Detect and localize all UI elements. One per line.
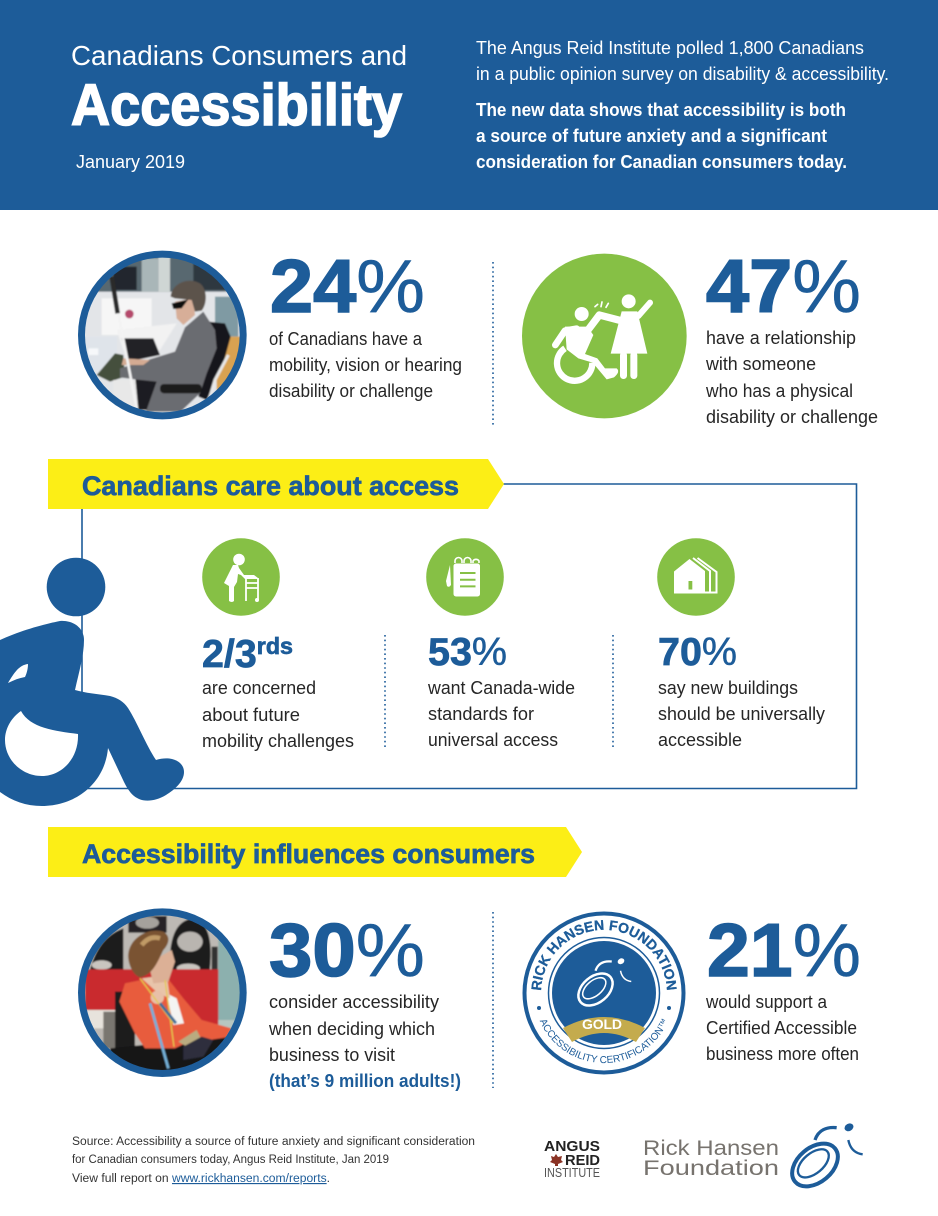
stat: 30%	[268, 908, 461, 1091]
logo: Rick Hansen Foundation: Foundation	[643, 1157, 779, 1180]
stat: 21%	[705, 908, 861, 1064]
text	[427, 678, 575, 750]
title	[71, 40, 407, 138]
stat text: disability or challenge	[706, 407, 878, 427]
stat text: (that’s 9 million adults!)	[269, 1071, 461, 1091]
banner: Canadians care about access: Canadians care about access	[82, 471, 459, 501]
icon: Rick Hansen Foundation gold certification badge: GOLD	[582, 1016, 622, 1032]
photo: woman in orange cardigan laughing	[78, 908, 247, 1077]
date: January 2019	[76, 152, 185, 172]
stat text: Certified Accessible	[706, 1018, 857, 1038]
source note: Source: Accessibility a source of future anxiety and significant consideration	[72, 1136, 475, 1148]
figure: 70%	[658, 631, 737, 674]
stat text: consider accessibility	[269, 992, 439, 1012]
text: should be universally	[658, 704, 825, 724]
icon: wheelchair figure	[0, 558, 184, 806]
text: say new buildings	[658, 678, 798, 698]
figure: 2/3	[202, 633, 256, 676]
stat text	[705, 328, 878, 427]
stat text: who has a physical	[705, 381, 853, 401]
text	[658, 678, 825, 750]
icon: Rick Hansen Foundation gold certification badge: ACCESSIBILITY CERTIFICATION™	[540, 1018, 666, 1064]
icon: notepad	[426, 538, 504, 616]
icon: houses	[657, 538, 735, 616]
stat text: would support a	[705, 992, 828, 1012]
stat text: business more often	[706, 1044, 859, 1064]
text: universal access	[428, 730, 558, 750]
icon: white wheelchair swirl	[572, 957, 631, 1012]
stat: 21%: 21%	[707, 908, 861, 992]
header band	[0, 0, 938, 210]
text: accessible	[658, 730, 742, 750]
source note	[72, 1136, 475, 1185]
stat: 47%	[705, 244, 878, 427]
banner: Accessibility influences consumers: Accessibility influences consumers	[82, 839, 535, 869]
stat: 30%: 30%	[269, 908, 425, 992]
stat: 24%: 24%	[270, 244, 425, 328]
photo: man with white cane at desk	[78, 251, 247, 420]
source note: for Canadian consumers today, Angus Reid Institute, Jan 2019	[72, 1154, 389, 1166]
header intro text: The Angus Reid Institute polled 1,800 Canadians	[476, 38, 864, 58]
stat column: 2/3rds	[202, 538, 354, 751]
stat text: when deciding which	[268, 1019, 435, 1039]
icon: Rick Hansen Foundation gold certification badge: RICK HANSEN FOUNDATION	[531, 920, 677, 990]
title: Accessibility	[71, 73, 402, 138]
text	[202, 678, 354, 751]
stat text: business to visit	[269, 1045, 395, 1065]
stat: 47%: 47%	[706, 244, 861, 328]
text: mobility challenges	[202, 731, 354, 751]
icon: Rick Hansen Foundation gold certification badge	[522, 912, 686, 1074]
figure: 53%	[428, 631, 507, 674]
text: are concerned	[202, 678, 316, 698]
icon: person with walker	[202, 538, 280, 616]
stat text: disability or challenge	[269, 381, 433, 401]
header intro text: in a public opinion survey on disability & accessibility.	[476, 64, 889, 84]
stat text	[268, 992, 461, 1091]
logo: Angus Reid Institute: REID	[565, 1152, 600, 1169]
icon: high five	[522, 254, 687, 418]
header intro text: The new data shows that accessibility is both	[476, 100, 846, 120]
stat text: mobility, vision or hearing	[269, 355, 462, 375]
stat text: with someone	[705, 354, 816, 374]
text: about future	[202, 705, 300, 725]
stat text	[705, 992, 859, 1064]
stat text: have a relationship	[706, 328, 856, 348]
text: standards for	[428, 704, 534, 724]
banner: Canadians care about access	[48, 459, 504, 509]
logo: Angus Reid Institute	[544, 1138, 600, 1180]
header intro text: a source of future anxiety and a significant	[476, 126, 827, 146]
logo: Angus Reid Institute: INSTITUTE	[544, 1166, 600, 1180]
header intro text	[476, 38, 889, 172]
stat text: of Canadians have a	[269, 329, 423, 349]
title: Canadians Consumers and	[71, 40, 407, 71]
logo: Rick Hansen Foundation: Rick Hansen	[643, 1137, 779, 1160]
figure: rds	[257, 633, 293, 659]
source note: View full report on www.rickhansen.com/reports .	[72, 1173, 330, 1185]
banner: Accessibility influences consumers	[48, 827, 582, 877]
logo: Angus Reid Institute: ANGUS	[544, 1138, 600, 1155]
header intro text: consideration for Canadian consumers today.	[476, 152, 847, 172]
stat column: 53%	[426, 538, 575, 750]
text: want Canada-wide	[427, 678, 575, 698]
stat text	[269, 329, 462, 401]
stat column: 70%	[657, 538, 825, 750]
stat: 24%	[269, 244, 462, 401]
logo: Rick Hansen Foundation	[643, 1122, 863, 1195]
